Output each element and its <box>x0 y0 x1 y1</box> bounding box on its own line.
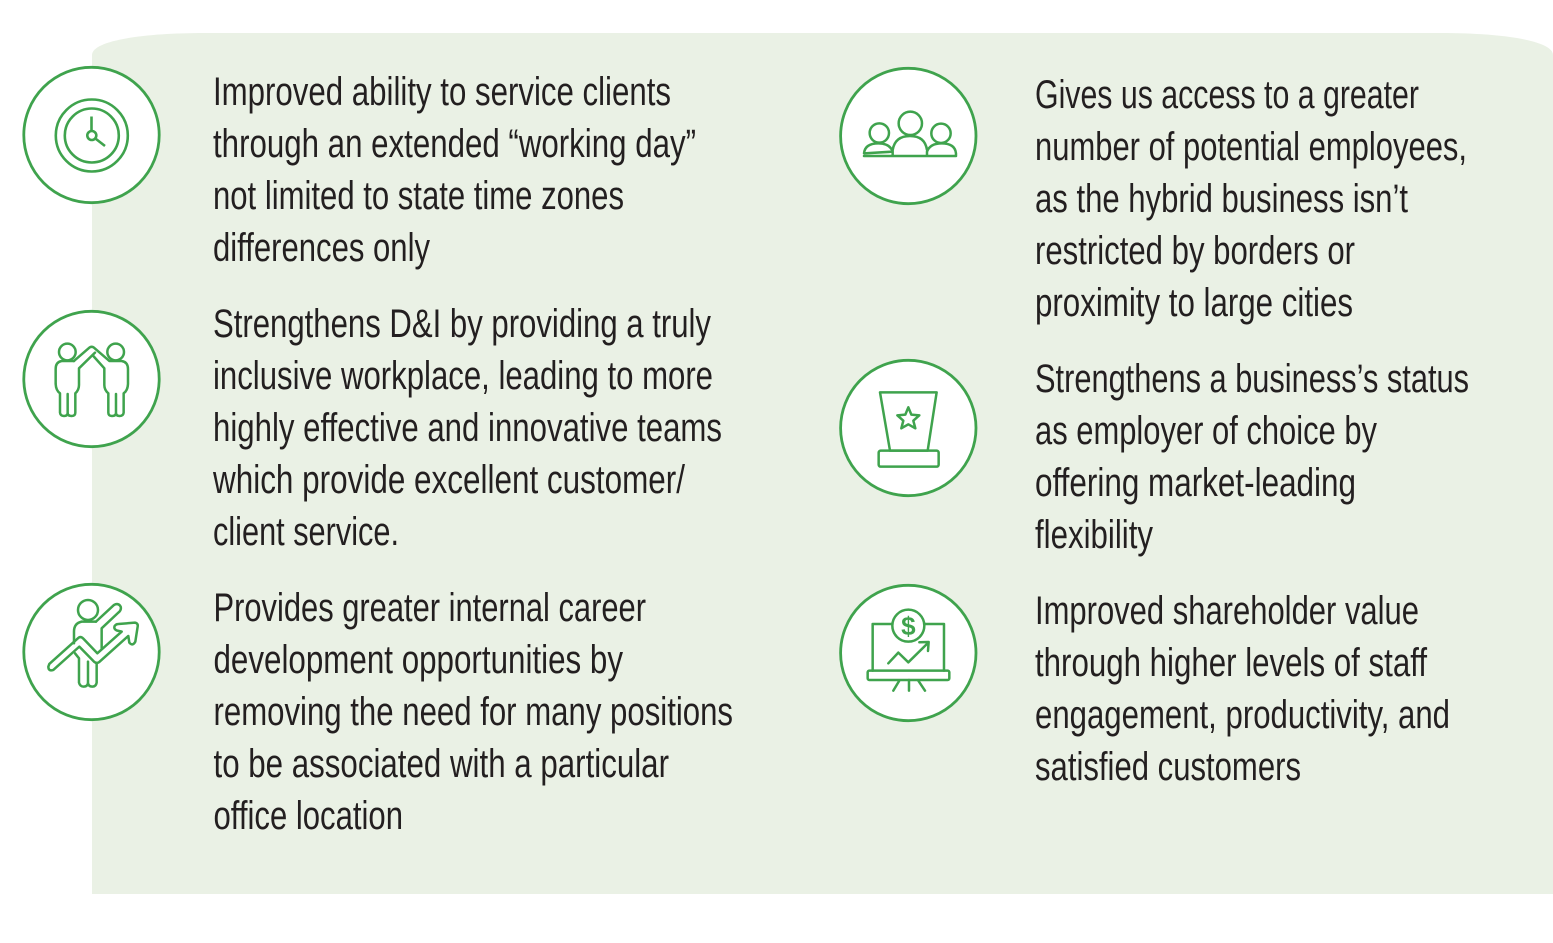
icon: award trophy with star <box>841 360 976 496</box>
text: employer of choice: offering market-leading <box>1035 461 1356 505</box>
text: extended working day: differences only <box>213 226 430 270</box>
text: shareholder value: through higher levels of staff <box>1035 641 1428 685</box>
text: access to employees: Gives us access to a greater <box>1035 73 1419 117</box>
text: access to employees: proximity to large cities <box>1035 281 1353 325</box>
icon: person with rising arrow <box>24 584 159 720</box>
icon: group of three people <box>841 68 976 204</box>
icon: two people high five <box>24 311 159 447</box>
text: extended working day <box>213 70 696 270</box>
text: career development: Provides greater internal career <box>214 586 646 630</box>
text: diversity and inclusion: Strengthens D&I by providing a truly <box>213 302 711 346</box>
text: diversity and inclusion: which provide excellent customer/ <box>212 458 686 502</box>
text: shareholder value: Improved shareholder value <box>1035 589 1419 633</box>
icon: presentation board with dollar and growth chart: $ <box>901 611 916 641</box>
text: diversity and inclusion: inclusive workplace, leading to more <box>213 354 713 398</box>
icon: clock <box>24 67 159 203</box>
text: diversity and inclusion: highly effective and innovative teams <box>213 406 722 450</box>
text: shareholder value: satisfied customers <box>1035 745 1301 789</box>
text: extended working day: not limited to state time zones <box>213 174 624 218</box>
text: employer of choice <box>1035 357 1469 557</box>
text: access to employees: as the hybrid business isn’t <box>1035 177 1408 221</box>
text: diversity and inclusion <box>212 302 722 554</box>
text: access to employees <box>1035 73 1467 325</box>
text: employer of choice: flexibility <box>1035 513 1153 557</box>
text: career development <box>214 586 733 838</box>
text: employer of choice: as employer of choice by <box>1035 409 1377 453</box>
text: diversity and inclusion: client service. <box>213 510 399 554</box>
text: career development: development opportunities by <box>214 638 623 682</box>
text: extended working day: Improved ability to service clients <box>213 70 671 114</box>
text: extended working day: through an extended “working day” <box>213 122 696 166</box>
text: shareholder value: engagement, productivity, and <box>1035 693 1450 737</box>
text: career development: office location <box>214 794 403 838</box>
text: shareholder value <box>1035 589 1450 789</box>
text: access to employees: restricted by borders or <box>1035 229 1355 273</box>
text: career development: to be associated with a particular <box>214 742 669 786</box>
icon: presentation board with dollar and growth chart <box>841 585 976 721</box>
text: career development: removing the need for many positions <box>214 690 733 734</box>
